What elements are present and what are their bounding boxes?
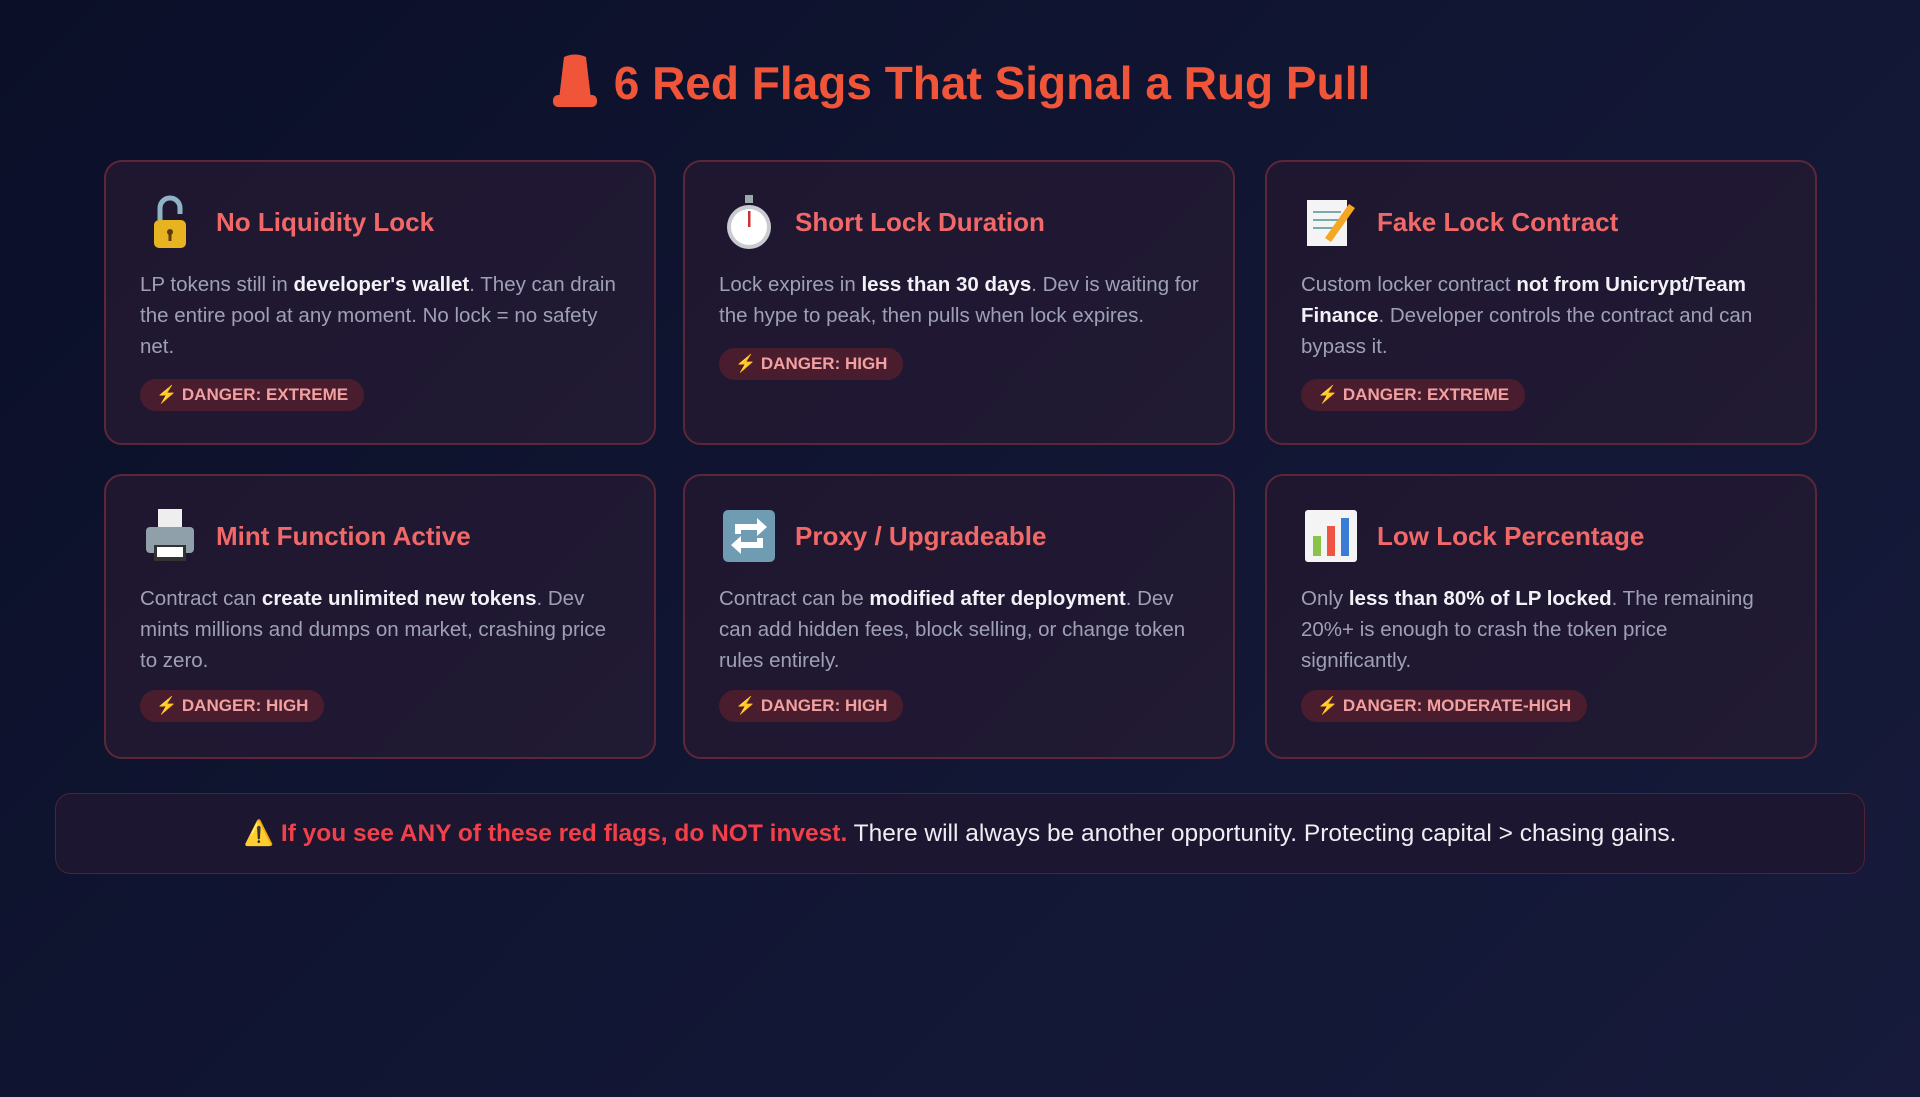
badge: ⚡ DANGER: HIGH xyxy=(735,354,887,373)
card: fake lock contract xyxy=(1265,160,1817,445)
badge xyxy=(719,690,903,722)
card: short lock duration xyxy=(683,160,1235,445)
heading: Fake Lock Contract xyxy=(1377,206,1618,236)
card: low lock percentage xyxy=(1265,474,1817,759)
card: mint function active xyxy=(104,474,656,759)
card: no liquidity lock xyxy=(104,160,656,445)
badge: ⚡ DANGER: HIGH xyxy=(735,696,887,715)
badge xyxy=(140,690,324,722)
text: Lock expires in less than 30 days. Dev is waiting for the hype to peak, then pulls when lock expires. xyxy=(719,273,1199,327)
badge xyxy=(1301,379,1525,411)
heading: Short Lock Duration xyxy=(795,206,1045,236)
badge xyxy=(140,379,364,411)
heading xyxy=(154,196,434,248)
badge xyxy=(1301,690,1587,722)
footer callout xyxy=(55,793,1865,874)
heading xyxy=(146,509,471,561)
heading xyxy=(723,510,1046,562)
badge: ⚡ DANGER: HIGH xyxy=(156,696,308,715)
card: proxy upgradeable xyxy=(683,474,1235,759)
badge: ⚡ DANGER: MODERATE-HIGH xyxy=(1317,696,1571,715)
heading: No Liquidity Lock xyxy=(216,206,434,236)
heading xyxy=(1305,510,1644,562)
badge: ⚡ DANGER: EXTREME xyxy=(1317,385,1509,404)
heading: Low Lock Percentage xyxy=(1377,520,1644,550)
text: Only less than 80% of LP locked. The remaining 20%+ is enough to crash the token price significantly. xyxy=(1301,587,1754,672)
text: Contract can create unlimited new tokens. Dev mints millions and dumps on market, crashing price to zero. xyxy=(140,587,606,672)
text: Custom locker contract not from Unicrypt/Team Finance. Developer controls the contract and can bypass it. xyxy=(1301,273,1752,358)
heading: Proxy / Upgradeable xyxy=(795,520,1046,550)
badge: ⚡ DANGER: EXTREME xyxy=(156,385,348,404)
heading xyxy=(727,195,1045,249)
footer callout: ⚠️ If you see ANY of these red flags, do NOT invest. There will always be another opportunity. Protecting capital > chasing gains. xyxy=(244,820,1676,847)
badge xyxy=(719,348,903,380)
text: LP tokens still in developer's wallet. They can drain the entire pool at any moment. No lock = no safety net. xyxy=(140,273,616,358)
title: 6 Red Flags That Signal a Rug Pull xyxy=(614,57,1370,109)
text: Contract can be modified after deployment. Dev can add hidden fees, block selling, or change token rules entirely. xyxy=(719,587,1185,672)
heading: Mint Function Active xyxy=(216,520,471,550)
heading xyxy=(1307,200,1618,246)
